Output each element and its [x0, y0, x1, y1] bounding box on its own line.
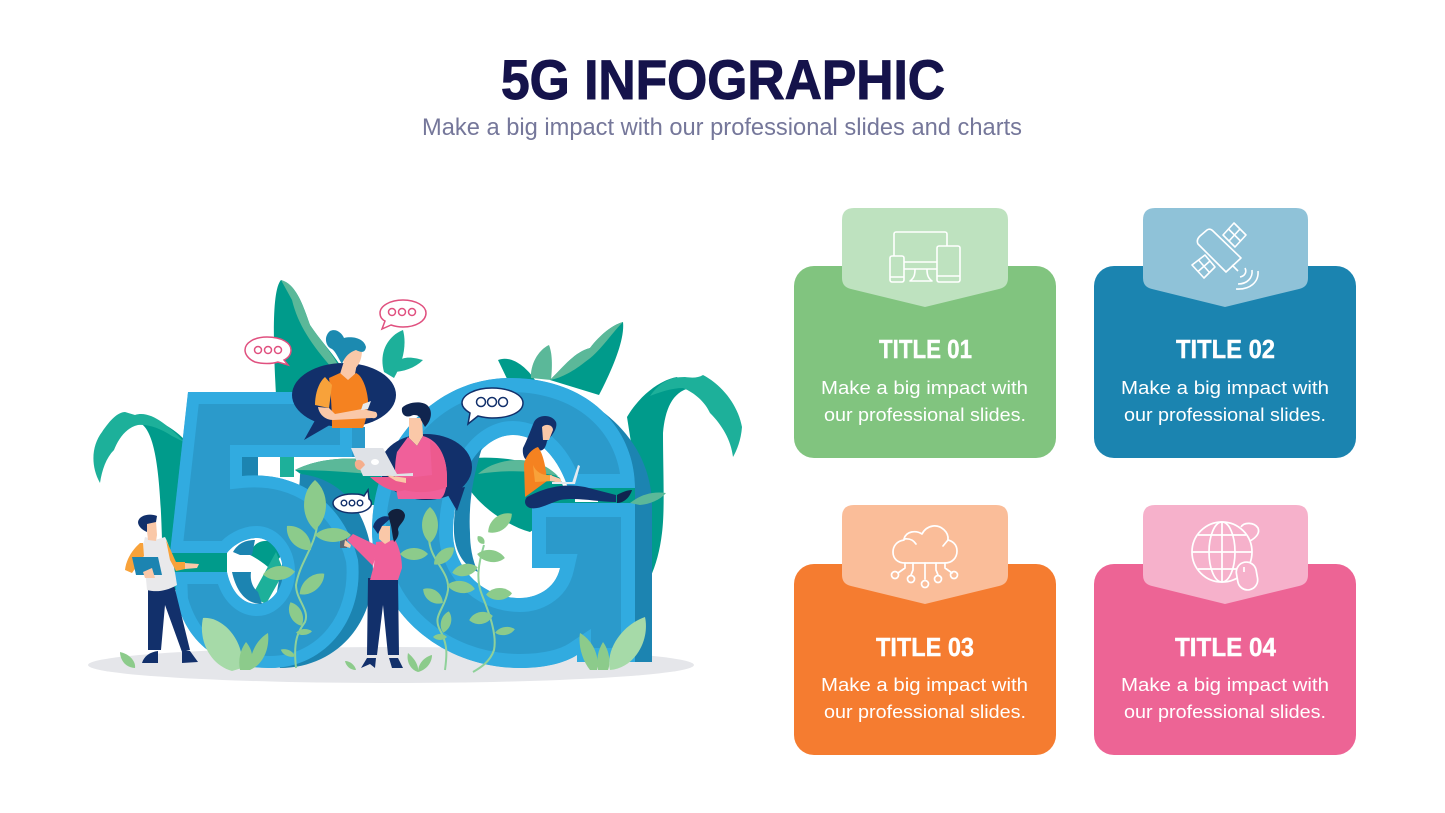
plant: leaf visible in the counter of 5: [250, 541, 284, 604]
speech bubble: navy small: [333, 490, 371, 513]
digit G: [372, 378, 652, 668]
vine: left: [262, 480, 351, 668]
icon: devices: [890, 232, 960, 282]
bush: middle bottom: [345, 653, 432, 672]
text: description 02: [1121, 377, 1329, 425]
icon: satellite: [1192, 223, 1258, 289]
text: description 04: Make a big impact with: [1121, 674, 1329, 695]
person: standing woman with phone: [340, 509, 405, 668]
subtitle: Make a big impact with our professional slides and charts: [422, 114, 1022, 141]
text: description 03: [821, 674, 1028, 722]
tab: title 04: [1143, 505, 1308, 604]
bush: right bottom: [579, 617, 646, 670]
ground shadow: [88, 647, 694, 683]
speech bubble: pink right: [380, 300, 426, 329]
bush: left bottom: [120, 618, 268, 671]
illustration: 5G with people and plants: [88, 280, 742, 683]
person: woman with phone in speech bubble: [292, 330, 396, 440]
plant: right arching leaf: [627, 375, 742, 578]
icon: cloud network: [892, 526, 958, 588]
person: woman sitting on G with laptop: [523, 416, 666, 508]
text: description 02: our professional slides.: [1124, 404, 1326, 425]
tab: title 02: [1143, 208, 1308, 307]
title: 5G INFOGRAPHIC: [501, 48, 945, 111]
speech bubble: pink left: [245, 337, 291, 365]
panel: title 02: [1094, 208, 1356, 458]
vine: right: [451, 508, 516, 672]
plant: left arching leaf: [93, 412, 227, 590]
digit 5: [170, 392, 373, 668]
panel: title 01: [794, 208, 1056, 458]
plant: small leaves behind bubble: [382, 330, 423, 378]
text: description 04: our professional slides.: [1124, 701, 1326, 722]
text: description 03: Make a big impact with: [821, 674, 1028, 695]
heading: title 01: TITLE 01: [879, 334, 972, 364]
text: description 01: our professional slides.: [824, 404, 1026, 425]
text: description 02: Make a big impact with: [1121, 377, 1329, 398]
heading: title 03: TITLE 03: [876, 632, 974, 662]
plant: central leaf behind 5 and G: [280, 457, 640, 532]
text: description 04: [1121, 674, 1329, 722]
speech bubble: navy on G: [462, 388, 523, 424]
panel: title 03: [794, 505, 1056, 755]
text: description 03: our professional slides.: [824, 701, 1026, 722]
person: man with laptop in speech bubble: [351, 402, 472, 511]
text: description 01: [821, 377, 1028, 425]
vine: middle: [400, 507, 476, 670]
plant: top left leaf: [274, 280, 340, 395]
text: description 01: Make a big impact with: [821, 377, 1028, 398]
person: man with tablet: [125, 515, 199, 663]
tab: title 03: [842, 505, 1008, 604]
heading: title 02: TITLE 02: [1176, 334, 1275, 364]
heading: title 04: TITLE 04: [1175, 632, 1276, 662]
plant: leaves above G: [498, 322, 623, 395]
panel: title 04: [1094, 505, 1356, 755]
icon: globe and mouse: [1192, 522, 1259, 592]
tab: title 01: [842, 208, 1008, 307]
